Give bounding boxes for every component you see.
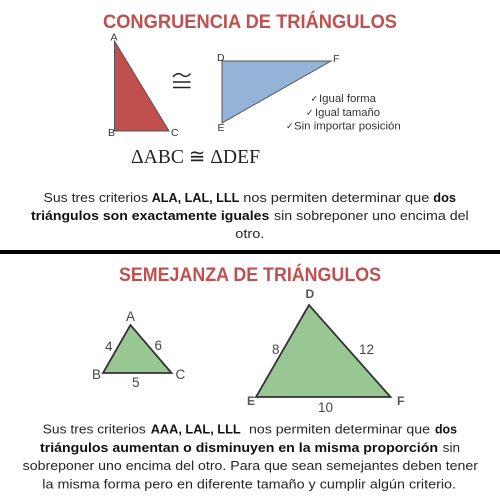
diagram: large similar triangle DEF: 8 bbox=[272, 342, 280, 357]
title: semejanza de triángulos: SEMEJANZA DE TRIÁNGULOS bbox=[119, 263, 381, 286]
text block: congruence description bbox=[31, 190, 469, 241]
title: congruencia de triángulos: CONGRUENCIA DE TRIÁNGULOS bbox=[103, 10, 397, 33]
diagram: large similar triangle DEF: F bbox=[397, 394, 404, 408]
text block: congruence description: triángulos son exactamente iguales bbox=[31, 208, 269, 223]
diagram: small similar triangle ABC: 5 bbox=[132, 375, 140, 390]
diagram: small similar triangle ABC bbox=[92, 309, 186, 390]
text block: similarity description bbox=[23, 422, 479, 491]
diagram: triangle ABC: A bbox=[110, 32, 118, 44]
text block: similarity description: la misma forma pero en diferente tamaño y cumplir algún criterio. bbox=[42, 476, 456, 491]
diagram: triangle DEF: D bbox=[217, 52, 225, 64]
diagram: triangle DEF: E bbox=[218, 122, 225, 134]
diagram: triangle DEF bbox=[217, 52, 339, 134]
diagram: small similar triangle ABC: A bbox=[126, 309, 135, 324]
diagram: triangle ABC: C bbox=[171, 127, 179, 139]
diagram: small similar triangle ABC: B bbox=[92, 367, 101, 382]
diagram: triangle DEF: F bbox=[333, 53, 339, 65]
text block: similarity description: nos permiten determinar que bbox=[249, 422, 430, 436]
diagram: small similar triangle ABC: 6 bbox=[154, 338, 162, 353]
checklist: congruence properties: Igual forma bbox=[319, 93, 376, 105]
text block: similarity description: triángulos aumentan o disminuyen en la misma proporción bbox=[40, 440, 438, 455]
checklist: congruence properties: ✓ bbox=[306, 108, 314, 118]
diagram: large similar triangle DEF: D bbox=[306, 287, 314, 301]
text block: congruence description: Sus tres criterios bbox=[44, 190, 148, 205]
diagram: triangle ABC bbox=[108, 32, 179, 139]
text block: similarity description: Sus tres criterios bbox=[43, 422, 146, 436]
text block: similarity description: dos bbox=[435, 422, 457, 436]
text block: similarity description: sin bbox=[443, 440, 460, 455]
text block: congruence description: otro. bbox=[235, 226, 264, 241]
checklist: congruence properties: ✓ bbox=[286, 122, 294, 132]
text block: congruence description: sin sobreponer uno encima del bbox=[274, 208, 469, 223]
icon: congruence symbol bbox=[173, 74, 190, 88]
diagram: large similar triangle DEF: 10 bbox=[318, 400, 333, 415]
diagram: large similar triangle DEF: 12 bbox=[359, 342, 374, 357]
checklist: congruence properties: Sin importar posición bbox=[294, 120, 401, 132]
formula: triangle ABC congruent to triangle DEF: ΔABC ≅ ΔDEF bbox=[131, 146, 260, 168]
diagram: large similar triangle DEF: E bbox=[247, 394, 255, 408]
diagram: large similar triangle DEF bbox=[247, 287, 404, 415]
diagram: small similar triangle ABC: C bbox=[176, 367, 186, 382]
text block: congruence description: ALA, LAL, LLL bbox=[152, 190, 239, 205]
diagram: small similar triangle ABC: 4 bbox=[105, 339, 113, 354]
diagram: triangle ABC: B bbox=[108, 127, 115, 139]
checklist: congruence properties: Igual tamaño bbox=[315, 107, 380, 119]
divider bar bbox=[0, 250, 500, 254]
text block: congruence description: nos permiten determinar que bbox=[243, 190, 429, 205]
checklist: congruence properties bbox=[286, 93, 401, 132]
text block: congruence description: dos bbox=[433, 190, 456, 205]
text block: similarity description: AAA, LAL, LLL bbox=[151, 422, 241, 436]
text block: similarity description: sobreponer uno encima del otro. Para que sean semejantes deben tener bbox=[23, 458, 479, 473]
checklist: congruence properties: ✓ bbox=[310, 94, 318, 104]
